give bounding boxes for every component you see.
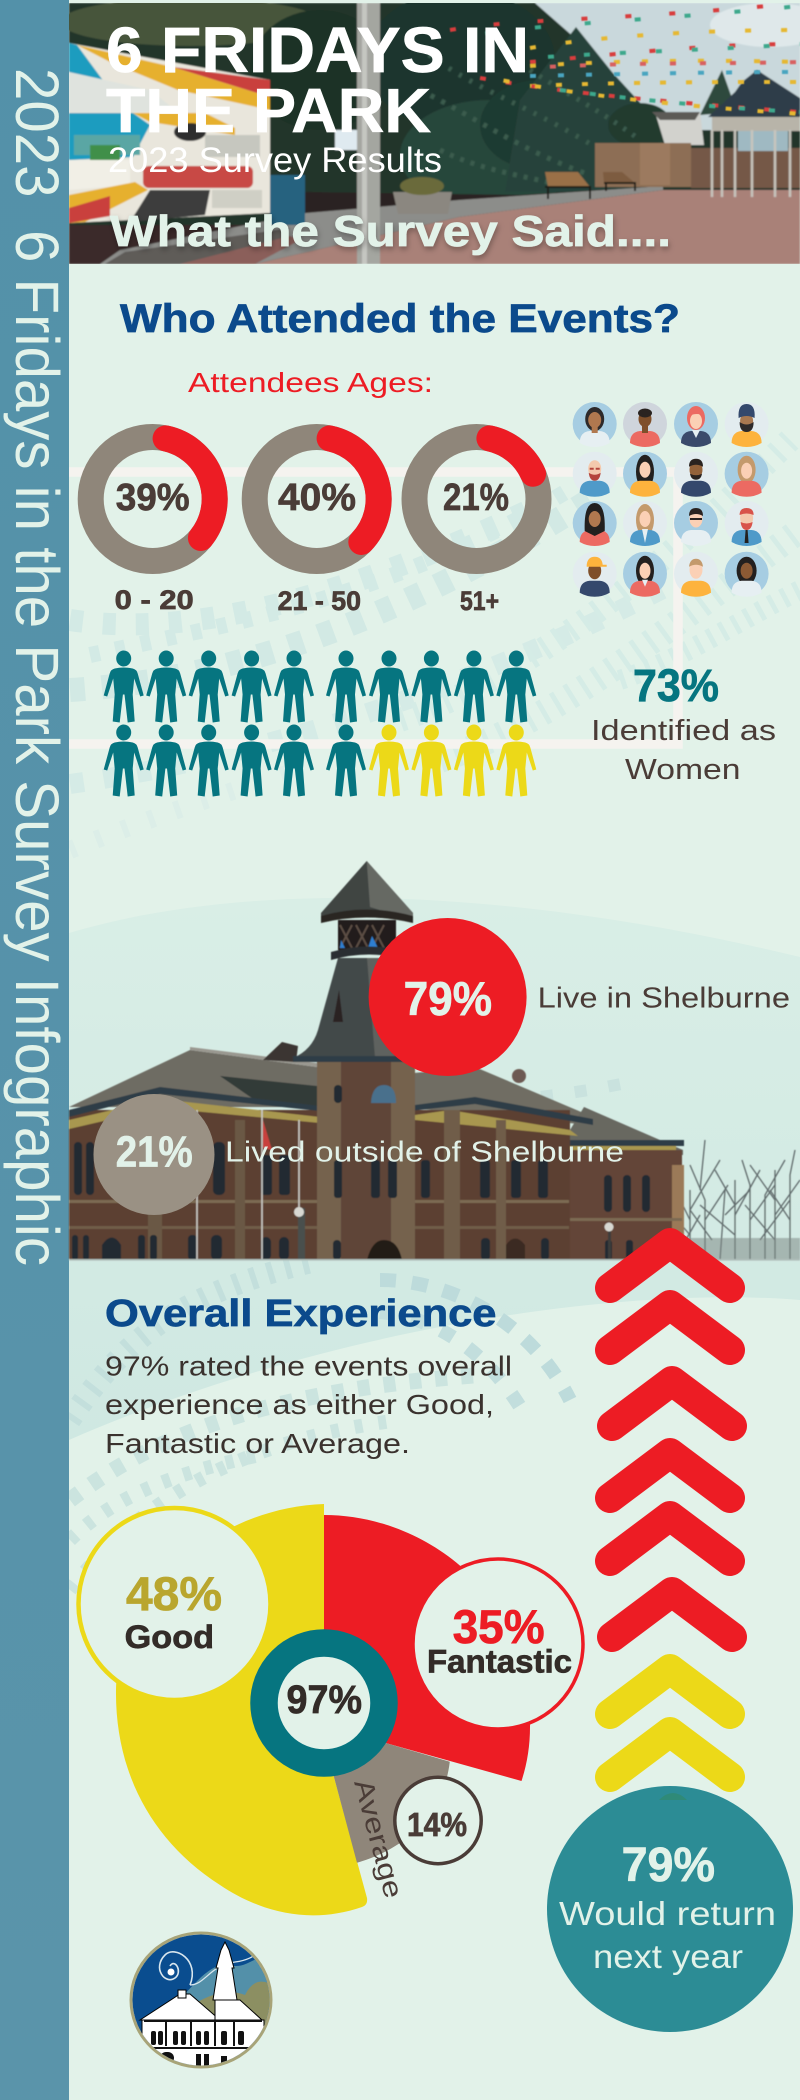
- callout: 79% would return: 79%: [622, 1839, 715, 1892]
- benches: [545, 172, 590, 187]
- callout: 73% women: [591, 660, 776, 786]
- stat: 79% live in Shelburne: 79%: [404, 972, 492, 1025]
- gazebo: [708, 70, 800, 117]
- right roofs: [400, 1067, 593, 1125]
- central brick tower: [317, 1056, 415, 1260]
- paragraph: overall experience: [105, 1351, 512, 1459]
- town hall drawing: [140, 1942, 264, 2070]
- avatar 1: [573, 402, 617, 447]
- avatar grid: [573, 402, 769, 597]
- donut chart: 21-50: [255, 437, 379, 616]
- planter: [393, 192, 452, 214]
- donut chart: 51+: [414, 437, 538, 616]
- chart: experience rating pie: [78, 1504, 583, 1915]
- avatar 12: [725, 501, 769, 546]
- stone bands: [69, 1200, 569, 1203]
- callout: 73% women: Identified as: [591, 715, 776, 747]
- subtitle: 2023 Survey Results: [108, 141, 442, 180]
- donut chart: 21-50: 21 - 50: [278, 586, 361, 616]
- banner signs: [69, 43, 270, 223]
- paragraph: overall experience: experience as either Good,: [105, 1389, 494, 1420]
- donut chart: 51+: 21%: [443, 477, 509, 519]
- stat: 79% live in Shelburne: [369, 918, 790, 1076]
- avatar 14: [623, 552, 667, 597]
- slice: good: [116, 1504, 367, 1915]
- heading: who attended: Who Attended the Events?: [120, 297, 680, 341]
- callout: fantastic: 35%: [453, 1600, 545, 1653]
- avatar 10: [623, 501, 667, 546]
- avatar 6: [623, 452, 667, 497]
- avatar 3: [674, 402, 718, 447]
- donut chart: 21-50: 40%: [278, 477, 356, 519]
- walls: [69, 1110, 570, 1260]
- paragraph: overall experience: Fantastic or Average.: [105, 1428, 410, 1459]
- building photo: [69, 861, 800, 1261]
- sidebar panel: [0, 0, 71, 2100]
- avatar 13: [573, 552, 617, 597]
- label: average: Average: [348, 1776, 409, 1901]
- ring: 97%: [264, 1643, 384, 1763]
- bunting flags: [450, 3, 800, 114]
- house: [655, 112, 704, 145]
- belfry: [338, 920, 396, 950]
- chevron arrows: return rate: [610, 1243, 732, 1777]
- slice: fantastic: [324, 1515, 530, 1781]
- avatar 5: [573, 452, 617, 497]
- spire: [321, 861, 413, 920]
- avatar 8: [725, 452, 769, 497]
- row 2 yellow people: [369, 724, 536, 796]
- avatar 11: [674, 501, 718, 546]
- avatar 4: [725, 402, 769, 447]
- pictogram: rows of people, teal and yellow: [104, 650, 536, 796]
- callout: 79% would return: [547, 1786, 793, 2032]
- sky: [535, 3, 800, 130]
- flag pole: [357, 3, 380, 264]
- what the survey said heading: What the Survey Said....: [110, 207, 671, 256]
- callout: fantastic: Fantastic: [427, 1644, 572, 1680]
- background band behind building: [69, 898, 800, 1440]
- title: THE PARK: [106, 77, 431, 146]
- trees: [660, 1140, 800, 1260]
- callout: 73% women: 73%: [633, 660, 719, 711]
- heading: overall experience: Overall Experience: [105, 1293, 496, 1335]
- stat: 21% lived outside: [94, 1094, 624, 1215]
- ring: 97%: 97%: [286, 1678, 362, 1722]
- callout: fantastic: [413, 1559, 583, 1729]
- fence: [595, 143, 691, 187]
- header photo: [60, 0, 800, 264]
- tower slate roof: [293, 958, 440, 1058]
- callout: good: [78, 1508, 270, 1700]
- callout: 73% women: Women: [625, 754, 740, 786]
- callout: average 14%: [395, 1777, 481, 1864]
- callout: good: 48%: [126, 1567, 222, 1620]
- callout: 79% would return: next year: [593, 1938, 743, 1975]
- avatar 16: [725, 552, 769, 597]
- foliage: [69, 3, 306, 46]
- callout: 79% would return: Would return: [559, 1895, 776, 1932]
- row 1 people: [104, 650, 536, 722]
- mulch, sidewalk, ground: [306, 192, 543, 212]
- stat: 79% live in Shelburne: Live in Shelburne: [538, 983, 790, 1015]
- row 2 teal people: [104, 724, 366, 796]
- avatar 2: [623, 402, 667, 447]
- sidebar vertical title: 2023 6 Fridays in the Park Survey Infographic: [3, 68, 71, 1266]
- left roof: [69, 1050, 329, 1107]
- heading: attendees ages: Attendees Ages:: [188, 367, 433, 398]
- cornice: [69, 1099, 320, 1129]
- callout: average 14%: 14%: [407, 1806, 467, 1843]
- avatar 15: [674, 552, 718, 597]
- donut chart: 0-20: 39%: [116, 477, 190, 519]
- donut chart: 0-20: [91, 437, 215, 615]
- flag poles: [197, 1110, 299, 1260]
- donut chart: 0-20: 0 - 20: [115, 585, 194, 615]
- donut chart: 51+: 51+: [460, 586, 499, 616]
- title: 6 FRIDAYS IN: [106, 14, 529, 86]
- paragraph: overall experience: 97% rated the events overall: [105, 1351, 512, 1382]
- avatar 7: [674, 452, 718, 497]
- stat: 21% lived outside: Lived outside of Shelburne: [225, 1137, 624, 1169]
- stat: 21% lived outside: 21%: [116, 1128, 193, 1177]
- logo: town crest: [130, 1930, 272, 2070]
- windows: [72, 1085, 650, 1260]
- callout: good: Good: [125, 1619, 214, 1655]
- title: [106, 14, 529, 146]
- slice: average: [324, 1703, 450, 1863]
- avatar 9: [573, 501, 617, 546]
